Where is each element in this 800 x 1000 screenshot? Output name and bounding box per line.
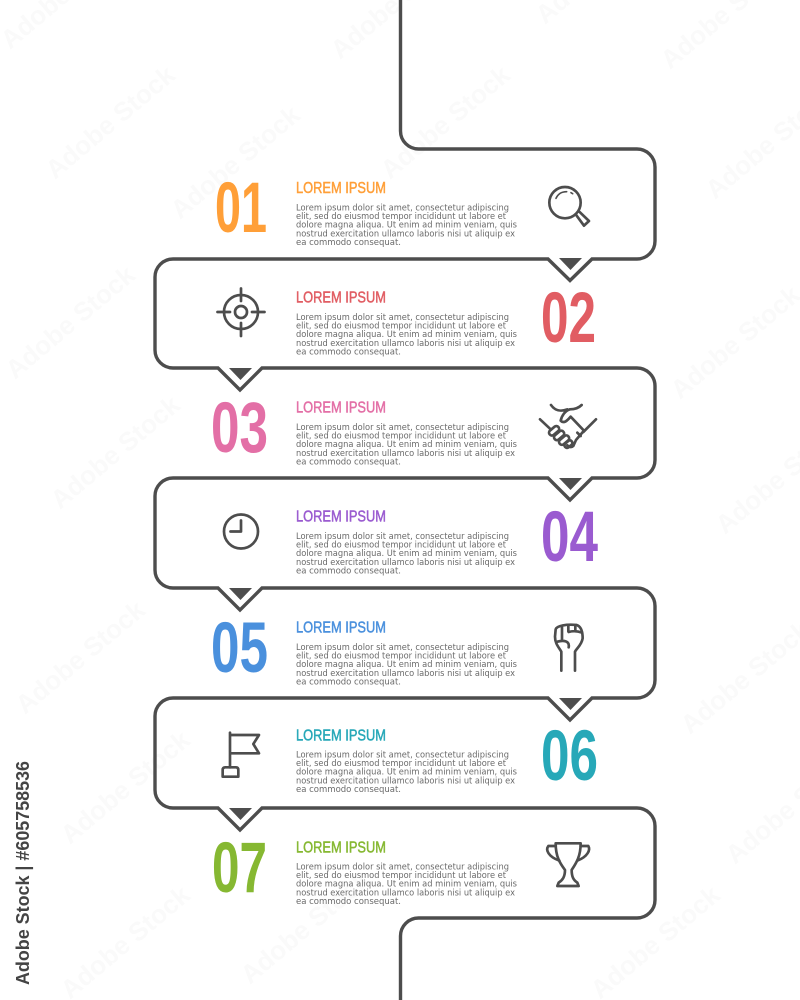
body text 04: elit, sed do eiusmod tempor incididunt ut labore et <box>296 540 507 550</box>
body text 07: ea commodo consequat. <box>296 896 401 906</box>
heading 03: LOREM IPSUM <box>296 400 386 416</box>
faint background watermark: Adobe Stock <box>165 99 306 225</box>
body text 04: dolore magna aliqua. Ut enim ad minim veniam, quis <box>296 548 517 558</box>
body text 01: Lorem ipsum dolor sit amet, consectetur adipiscing <box>296 202 509 212</box>
step 02 <box>296 279 596 358</box>
pointer triangles <box>229 258 582 820</box>
body text 03: dolore magna aliqua. Ut enim ad minim veniam, quis <box>296 439 517 449</box>
number 02: 02 <box>541 279 596 358</box>
body text 06: dolore magna aliqua. Ut enim ad minim veniam, quis <box>296 767 517 777</box>
winding connector line with pointers <box>155 0 655 1000</box>
body text 03: Lorem ipsum dolor sit amet, consectetur adipiscing <box>296 422 509 432</box>
body text 02: nostrud exercitation ullamco laboris nisi ut aliquip ex <box>296 338 515 348</box>
faint background watermark: Adobe Stock <box>55 724 196 850</box>
step 03 <box>211 389 517 468</box>
heading 02: LOREM IPSUM <box>296 290 386 306</box>
body text 06 <box>296 750 517 794</box>
faint background watermark: Adobe Stock <box>235 864 376 990</box>
body text 05: nostrud exercitation ullamco laboris nisi ut aliquip ex <box>296 668 515 678</box>
icon: raised fist <box>555 625 583 671</box>
faint background watermark: Adobe Stock <box>10 594 151 720</box>
body text 02: ea commodo consequat. <box>296 346 401 356</box>
body text 04: nostrud exercitation ullamco laboris nisi ut aliquip ex <box>296 557 515 567</box>
body text 06: ea commodo consequat. <box>296 784 401 794</box>
body text 03: nostrud exercitation ullamco laboris nisi ut aliquip ex <box>296 448 515 458</box>
icon: handshake <box>540 405 596 449</box>
body text 01: dolore magna aliqua. Ut enim ad minim veniam, quis <box>296 220 517 230</box>
body text 06: nostrud exercitation ullamco laboris nisi ut aliquip ex <box>296 775 515 785</box>
body text 04: ea commodo consequat. <box>296 566 401 576</box>
body text 01: ea commodo consequat. <box>296 237 401 247</box>
step 06 <box>296 717 598 796</box>
number 07: 07 <box>212 829 267 908</box>
body text 03 <box>296 422 517 466</box>
body text 02 <box>296 312 517 356</box>
step 04 <box>296 498 598 577</box>
heading 04: LOREM IPSUM <box>296 508 386 526</box>
heading 01: LOREM IPSUM <box>296 180 386 197</box>
heading 06: LOREM IPSUM <box>296 728 386 744</box>
body text 07: Lorem ipsum dolor sit amet, consectetur adipiscing <box>296 862 509 872</box>
faint background watermark: Adobe Stock <box>0 259 141 385</box>
body text 07: dolore magna aliqua. Ut enim ad minim veniam, quis <box>296 879 517 889</box>
body text 05: elit, sed do eiusmod tempor incididunt ut labore et <box>296 650 507 660</box>
body text 01: elit, sed do eiusmod tempor incididunt ut labore et <box>296 211 507 221</box>
body text 05: ea commodo consequat. <box>296 676 401 686</box>
number 01: 01 <box>215 169 267 248</box>
body text 03: elit, sed do eiusmod tempor incididunt ut labore et <box>296 430 507 440</box>
body text 01 <box>296 202 517 247</box>
faint background watermark: Adobe Stock <box>375 59 516 185</box>
number 03: 03 <box>211 389 268 468</box>
body text 07: nostrud exercitation ullamco laboris nisi ut aliquip ex <box>296 887 515 897</box>
number 04: 04 <box>541 498 598 577</box>
body text 03: ea commodo consequat. <box>296 456 401 466</box>
icon: clock <box>224 514 258 548</box>
icon: trophy <box>547 843 589 886</box>
step 01 <box>215 169 517 248</box>
body text 02: Lorem ipsum dolor sit amet, consectetur adipiscing <box>296 312 509 322</box>
body text 04 <box>296 531 517 576</box>
step 05 <box>211 609 517 688</box>
heading 05: LOREM IPSUM <box>296 620 386 636</box>
icon: crosshair target <box>218 288 264 336</box>
heading 07: LOREM IPSUM <box>296 840 386 856</box>
body text 06: elit, sed do eiusmod tempor incididunt ut labore et <box>296 758 507 768</box>
body text 07: elit, sed do eiusmod tempor incididunt ut labore et <box>296 870 507 880</box>
step 07 <box>212 829 517 908</box>
body text 04: Lorem ipsum dolor sit amet, consectetur adipiscing <box>296 531 509 541</box>
body text 05 <box>296 642 517 686</box>
body text 05: dolore magna aliqua. Ut enim ad minim veniam, quis <box>296 659 517 669</box>
body text 05: Lorem ipsum dolor sit amet, consectetur adipiscing <box>296 642 509 652</box>
body text 01: nostrud exercitation ullamco laboris nisi ut aliquip ex <box>296 228 515 238</box>
body text 02: dolore magna aliqua. Ut enim ad minim veniam, quis <box>296 329 517 339</box>
faint background watermark: Adobe Stock <box>40 59 181 185</box>
stock photo credit: Adobe Stock | #605758536 <box>13 761 33 985</box>
body text 02: elit, sed do eiusmod tempor incididunt ut labore et <box>296 320 507 330</box>
body text 07 <box>296 862 517 906</box>
number 06: 06 <box>541 717 598 796</box>
number 05: 05 <box>211 609 268 688</box>
icon: flag <box>223 733 259 777</box>
icon: magnifying glass <box>549 187 589 226</box>
body text 06: Lorem ipsum dolor sit amet, consectetur adipiscing <box>296 750 509 760</box>
faint background watermark: Adobe Stock <box>45 389 186 515</box>
